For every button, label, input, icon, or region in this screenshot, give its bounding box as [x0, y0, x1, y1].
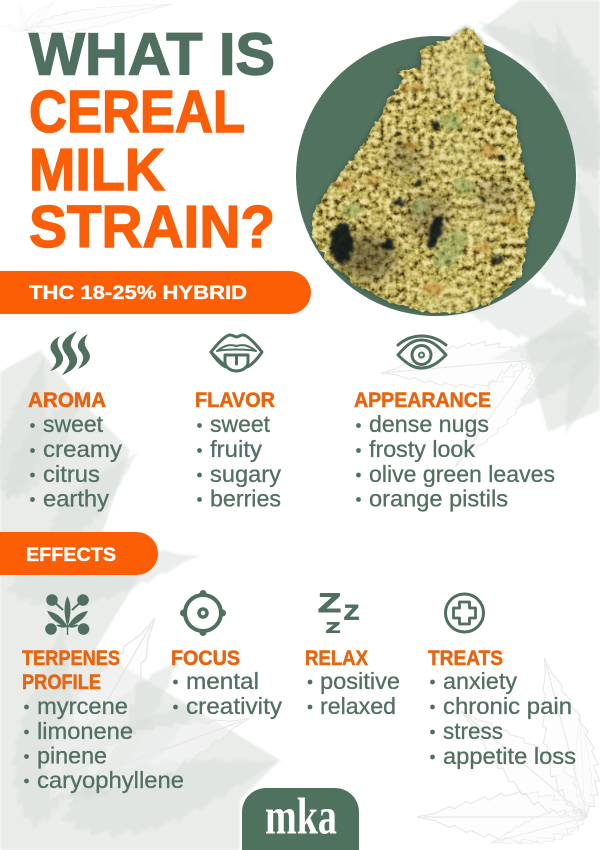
panel: terpenes profile: caryophyllene [37, 767, 184, 793]
panel: flavor: sweet [210, 411, 270, 437]
panel: focus: mental [186, 668, 259, 694]
icon: aroma steam [50, 331, 90, 375]
panel: aroma: sweet [43, 411, 103, 437]
panel: treats: chronic pain [443, 693, 572, 719]
title: STRAIN? [29, 194, 275, 260]
pill: effects [0, 532, 158, 575]
panel: aroma: AROMA [28, 389, 106, 412]
panel: appearance: dense nugs [369, 411, 489, 437]
icon: flavor lips and tongue [211, 335, 262, 371]
panel: appearance [354, 389, 555, 512]
panel: aroma: creamy [43, 436, 122, 462]
panel: appearance: olive green leaves [369, 461, 555, 487]
icon: terpenes leaf with molecules [46, 595, 88, 635]
title: MILK [29, 137, 165, 203]
panel: aroma: earthy [43, 486, 109, 512]
panel: terpenes profile [22, 647, 184, 793]
panel: relax: relaxed [320, 693, 396, 719]
panel: flavor: sugary [210, 461, 281, 487]
logo badge: mka [265, 788, 337, 846]
panel: terpenes profile: limonene [37, 718, 133, 744]
panel: relax: positive [320, 668, 400, 694]
title: WHAT IS [29, 22, 275, 88]
icon: treats medical cross [446, 594, 484, 632]
panel: terpenes profile: pinene [37, 742, 107, 768]
panel: aroma [28, 389, 122, 512]
pill: effects: EFFECTS [26, 544, 116, 566]
panel: appearance: frosty look [369, 436, 475, 462]
icon: relax zzz [318, 588, 359, 636]
panel: focus: creativity [186, 693, 282, 719]
panel: appearance: APPEARANCE [354, 389, 491, 412]
panel: treats: appetite loss [443, 743, 576, 769]
icon: relax zzz: Z [318, 588, 341, 618]
panel: flavor: FLAVOR [195, 389, 275, 412]
panel: terpenes profile: PROFILE [22, 671, 101, 694]
icon: relax zzz: Z [344, 602, 359, 624]
panel: flavor: berries [210, 486, 281, 512]
icon: focus target [180, 590, 226, 636]
panel: appearance: orange pistils [369, 486, 508, 512]
pill: THC content [0, 271, 311, 314]
icon: appearance eye [398, 336, 446, 368]
icon: relax zzz: Z [326, 620, 340, 636]
title: CEREAL [29, 79, 245, 145]
panel: treats [428, 647, 576, 769]
photo: green circle with cannabis bud [296, 27, 576, 316]
panel: treats: TREATS [428, 647, 503, 670]
panel: flavor: fruity [210, 436, 262, 462]
panel: terpenes profile: myrcene [37, 693, 128, 719]
panel: treats: stress [443, 718, 503, 744]
panel: focus [171, 647, 282, 719]
pill: THC content: THC 18-25% HYBRID [29, 282, 247, 304]
panel: relax: RELAX [305, 647, 368, 670]
panel: treats: anxiety [443, 668, 517, 694]
panel: terpenes profile: TERPENES [22, 647, 120, 670]
panel: relax [305, 647, 400, 719]
panel: aroma: citrus [43, 461, 100, 487]
panel: flavor [195, 389, 281, 512]
panel: focus: FOCUS [171, 647, 240, 670]
title [29, 22, 275, 260]
